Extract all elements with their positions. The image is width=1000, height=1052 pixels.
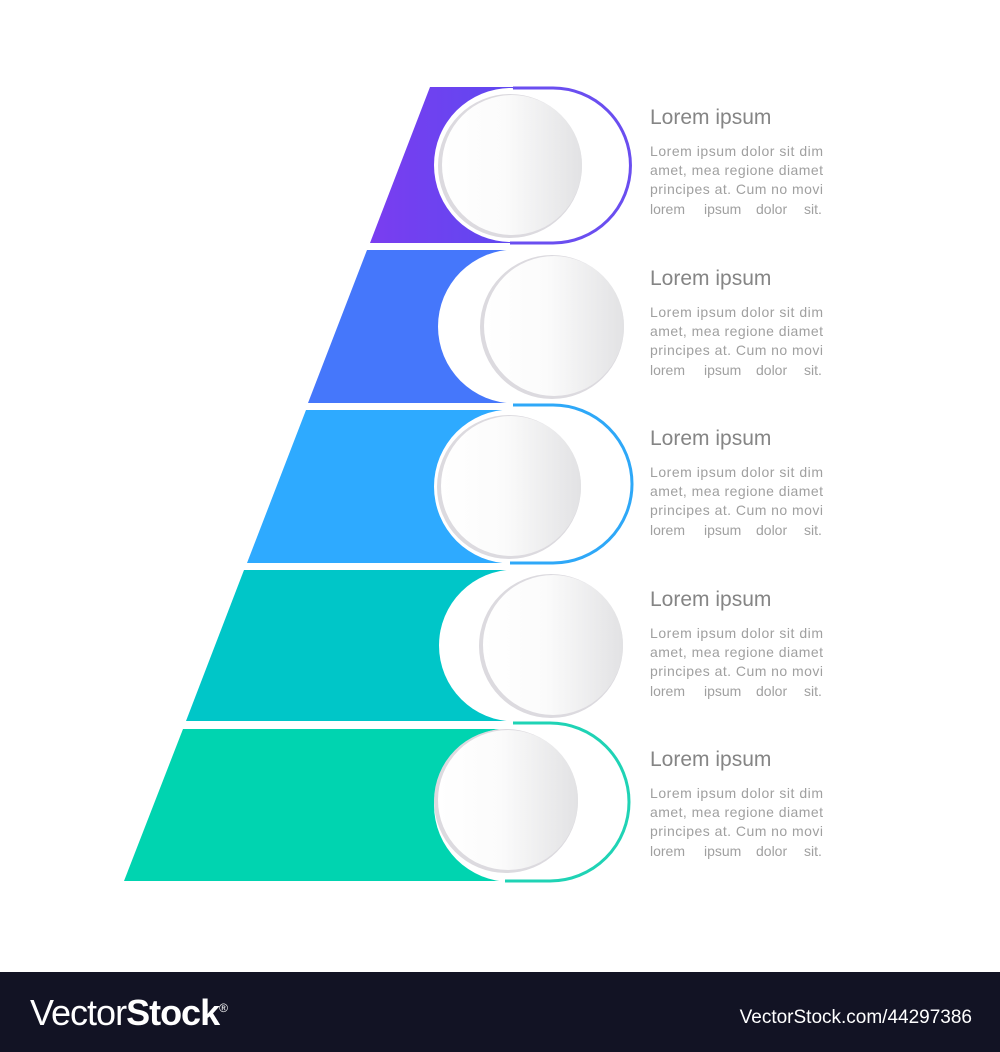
text block 5: amet, mea regione diamet bbox=[650, 804, 823, 820]
text block 3 bbox=[650, 427, 823, 538]
text block 5: ipsum bbox=[704, 843, 741, 859]
footer bar bbox=[0, 972, 1000, 1052]
text block 1: lorem bbox=[650, 201, 685, 217]
text block 4: Lorem ipsum bbox=[650, 588, 771, 611]
text block 5 bbox=[650, 748, 823, 859]
text block 5: Lorem ipsum dolor sit dim bbox=[650, 785, 823, 801]
footer url: VectorStock.com/44297386 bbox=[740, 1007, 972, 1028]
text block 3: Lorem ipsum dolor sit dim bbox=[650, 464, 823, 480]
tier 2 bbox=[308, 250, 624, 404]
text block 2: Lorem ipsum dolor sit dim bbox=[650, 304, 823, 320]
tier 1 bbox=[370, 87, 630, 243]
text block 4: lorem bbox=[650, 683, 685, 699]
text block 4 bbox=[650, 588, 823, 699]
text block 1: dolor bbox=[756, 201, 787, 217]
text block 4: sit. bbox=[804, 683, 822, 699]
tier 5 bbox=[124, 723, 629, 882]
tier 4 bbox=[186, 570, 623, 722]
text block 3: principes at. Cum no movi bbox=[650, 502, 823, 518]
text block 4: dolor bbox=[756, 683, 787, 699]
text block 1: principes at. Cum no movi bbox=[650, 181, 823, 197]
text block 3: amet, mea regione diamet bbox=[650, 483, 823, 499]
text block 5: dolor bbox=[756, 843, 787, 859]
text block 5: sit. bbox=[804, 843, 822, 859]
text block 1: Lorem ipsum dolor sit dim bbox=[650, 143, 823, 159]
icon circle 5 bbox=[434, 729, 578, 873]
tier 3 bbox=[247, 405, 632, 564]
text block 1: Lorem ipsum bbox=[650, 106, 771, 129]
text block 4: ipsum bbox=[704, 683, 741, 699]
text block 4: Lorem ipsum dolor sit dim bbox=[650, 625, 823, 641]
text block 3: dolor bbox=[756, 522, 787, 538]
footer logo: VectorStock® bbox=[30, 992, 227, 1033]
text block 2: principes at. Cum no movi bbox=[650, 342, 823, 358]
text block 3: Lorem ipsum bbox=[650, 427, 771, 450]
text block 2: sit. bbox=[804, 362, 822, 378]
icon circle 4 bbox=[479, 574, 623, 718]
text block 2: lorem bbox=[650, 362, 685, 378]
icon circle 2 bbox=[480, 255, 624, 399]
icon circle 1 bbox=[438, 94, 582, 238]
icon circle 3 bbox=[437, 415, 581, 559]
text block 2: amet, mea regione diamet bbox=[650, 323, 823, 339]
text block 2: dolor bbox=[756, 362, 787, 378]
text block 1: amet, mea regione diamet bbox=[650, 162, 823, 178]
text block 3: sit. bbox=[804, 522, 822, 538]
text block 5: Lorem ipsum bbox=[650, 748, 771, 771]
text block 2: Lorem ipsum bbox=[650, 267, 771, 290]
text block 5: lorem bbox=[650, 843, 685, 859]
text block 4: principes at. Cum no movi bbox=[650, 663, 823, 679]
text block 1: ipsum bbox=[704, 201, 741, 217]
text block 3: ipsum bbox=[704, 522, 741, 538]
text block 4: amet, mea regione diamet bbox=[650, 644, 823, 660]
text block 5: principes at. Cum no movi bbox=[650, 823, 823, 839]
text block 1 bbox=[650, 106, 823, 217]
text block 2 bbox=[650, 267, 823, 378]
text block 2: ipsum bbox=[704, 362, 741, 378]
text block 1: sit. bbox=[804, 201, 822, 217]
text block 3: lorem bbox=[650, 522, 685, 538]
